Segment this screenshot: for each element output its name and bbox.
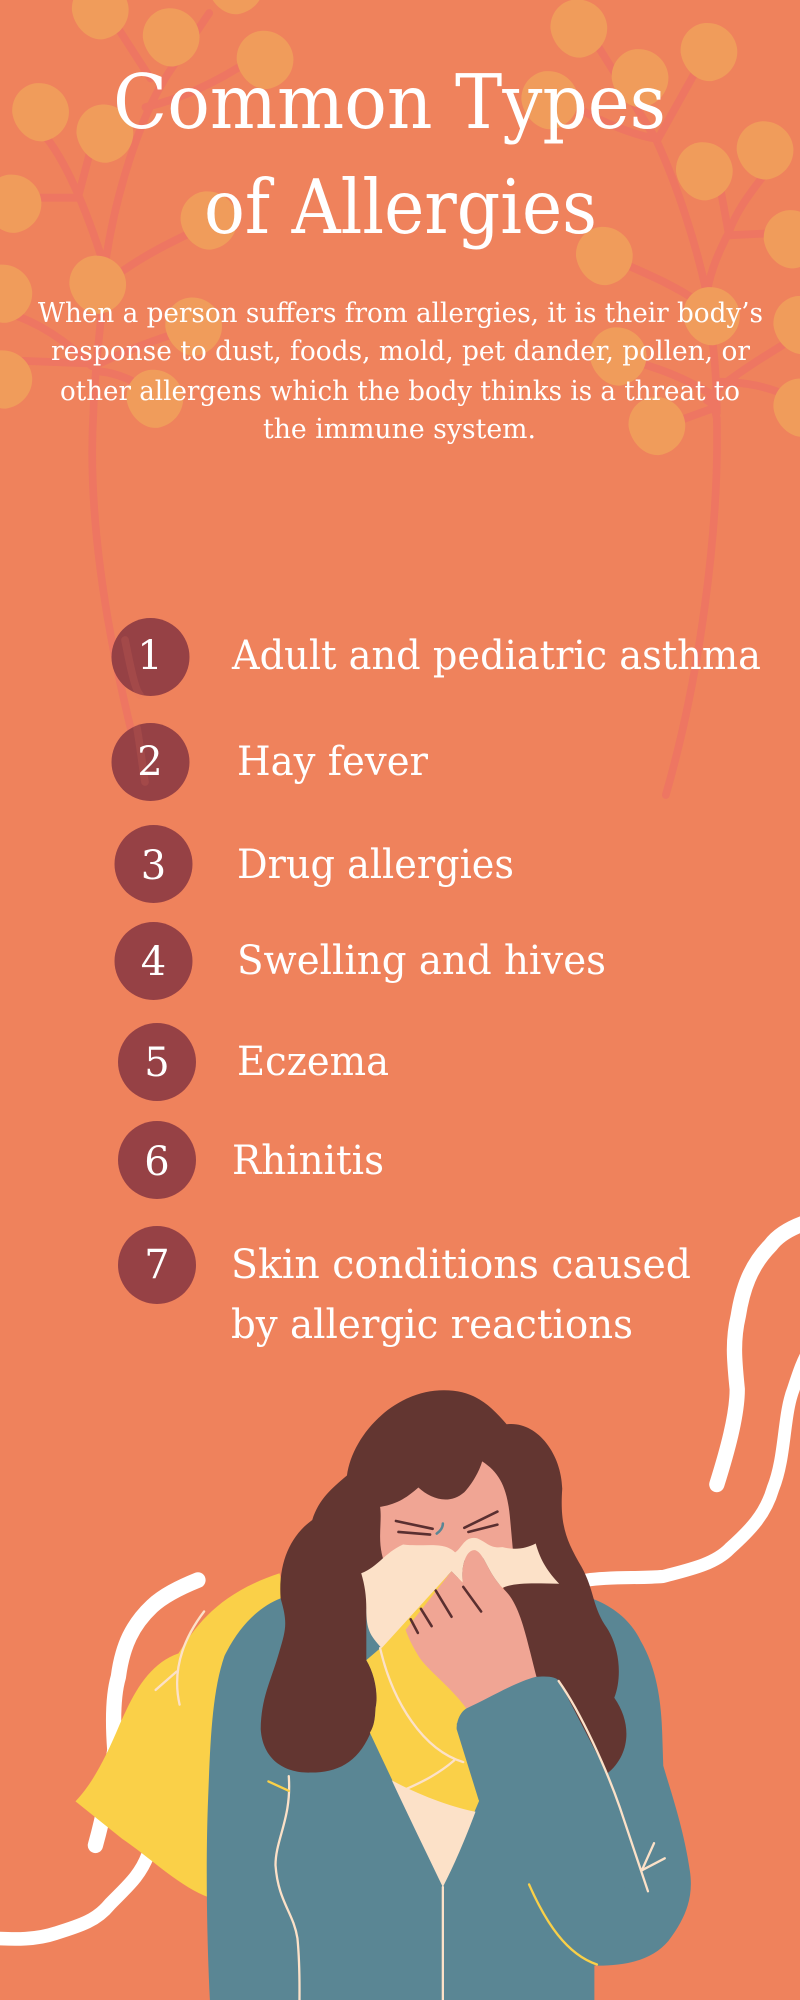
intro paragraph [38,298,763,445]
tissue [361,1538,559,1648]
hand [406,1550,537,1709]
shawl veins [156,1611,204,1705]
illustration: woman sneezing into a tissue [0,1221,800,2000]
title: Common Types [113,58,666,146]
item 3 [114,825,514,903]
title [113,58,666,251]
item 4: Swelling and hives [237,938,606,984]
white squiggle: right [587,1347,800,1580]
yellow scarf [366,1571,480,1812]
item 2 [112,723,429,801]
hair [261,1390,626,1774]
background tree: right [521,0,800,795]
item 7 [118,1226,691,1348]
white squiggle: upper right [717,1221,800,1484]
intro paragraph: other allergens which the body thinks is a threat to [60,376,740,407]
list of allergy types [112,618,761,1348]
item 6 [118,1121,384,1199]
teal nose mark [437,1524,443,1534]
item 6: 6 [144,1139,170,1185]
item 1 [112,618,761,696]
intro paragraph: When a person suffers from allergies, it is their body’s [38,298,763,329]
intro paragraph: response to dust, foods, mold, pet dander, pollen, or [51,336,750,367]
white squiggle: upper left [95,1580,198,1845]
item 2: Hay fever [237,739,429,785]
item 7: 7 [144,1242,170,1288]
item 3: Drug allergies [237,842,514,888]
background tree: left [0,0,293,782]
face [380,1461,513,1570]
title: of Allergies [204,163,597,251]
jacket sleeve [457,1676,651,1894]
eyes squeezed shut [396,1512,497,1535]
item 4 [114,922,606,1000]
item 5 [118,1023,389,1101]
fingers [411,1587,481,1633]
item 5: Eczema [237,1039,389,1085]
item 3: 3 [141,843,166,889]
jacket lines [276,1648,665,2000]
item 5: 5 [144,1040,170,1086]
intro paragraph: the immune system. [263,414,536,445]
item 1: Adult and pediatric asthma [231,633,761,679]
item 2: 2 [137,739,163,785]
cream neckline [392,1780,476,1887]
item 1: 1 [137,633,163,679]
yellow accent lines [268,1781,597,1964]
white squiggle: lower left [0,1855,148,1939]
yellow shawl behind [76,1573,306,1898]
item 7: Skin conditions caused [231,1242,691,1288]
teal jacket [207,1598,691,2000]
item 7: by allergic reactions [231,1302,633,1348]
item 4: 4 [141,939,166,985]
item 6: Rhinitis [232,1138,384,1184]
